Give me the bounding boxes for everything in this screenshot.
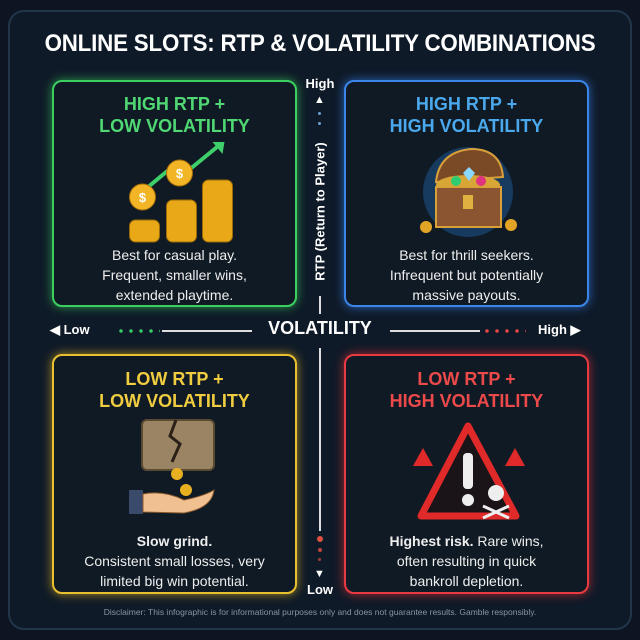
heading: HIGH VOLATILITY (390, 391, 543, 411)
disclaimer: Disclaimer: This infographic is for informational purposes only and does not guarantee results. Gamble responsibly. (104, 607, 536, 617)
body text (102, 247, 247, 303)
body text: bankroll depletion. (410, 573, 523, 589)
body text (84, 533, 265, 589)
heading: LOW RTP + (125, 369, 224, 389)
vertical axis: RTP: ▼ (314, 568, 325, 580)
horizontal axis: volatility: High ▶ (538, 322, 580, 337)
title: ONLINE SLOTS: RTP & VOLATILITY COMBINATIONS (45, 30, 595, 57)
heading: LOW VOLATILITY (99, 391, 250, 411)
body text: often resulting in quick (397, 553, 536, 569)
icon: cracked ticket and hand (129, 419, 215, 514)
heading: LOW VOLATILITY (99, 116, 250, 136)
vertical axis: RTP: High (306, 76, 334, 91)
body text: Best for casual play. (112, 247, 237, 263)
panel: high RTP high volatility (344, 80, 589, 307)
heading: HIGH VOLATILITY (390, 116, 543, 136)
panel: high RTP low volatility (52, 80, 297, 307)
body text: Frequent, smaller wins, (102, 267, 247, 283)
icon: treasure chest (420, 147, 517, 237)
body text: Consistent small losses, very (84, 553, 265, 569)
vertical axis: RTP: RTP (Return to Player) (312, 142, 328, 281)
horizontal axis: volatility: ◀ Low (50, 322, 90, 337)
horizontal axis: volatility: VOLATILITY (268, 318, 372, 338)
heading (99, 369, 250, 411)
panel: low RTP low volatility (52, 354, 297, 594)
body text: massive payouts. (412, 287, 521, 303)
body text (390, 247, 544, 303)
heading (390, 94, 543, 136)
body text: Slow grind. (137, 533, 212, 549)
icon: coin stacks (129, 142, 233, 242)
heading (390, 369, 543, 411)
icon: warning triangle with skull (413, 422, 525, 520)
heading: LOW RTP + (417, 369, 516, 389)
body text: extended playtime. (116, 287, 233, 303)
body text: Highest risk. Rare wins, (389, 533, 544, 549)
heading: HIGH RTP + (124, 94, 225, 114)
body text: Infrequent but potentially (390, 267, 543, 283)
icon: coin stacks: $ (176, 166, 184, 181)
heading: HIGH RTP + (416, 94, 517, 114)
vertical axis: RTP: ▲ (314, 94, 325, 106)
body text: limited big win potential. (100, 573, 249, 589)
vertical axis: RTP: Low (307, 582, 333, 597)
heading (99, 94, 250, 136)
horizontal axis: volatility (50, 318, 581, 338)
body text (389, 533, 544, 589)
vertical axis: RTP (306, 76, 334, 597)
panel: low RTP high volatility (344, 354, 589, 594)
body text: Best for thrill seekers. (399, 247, 534, 263)
icon: coin stacks: $ (139, 190, 147, 205)
